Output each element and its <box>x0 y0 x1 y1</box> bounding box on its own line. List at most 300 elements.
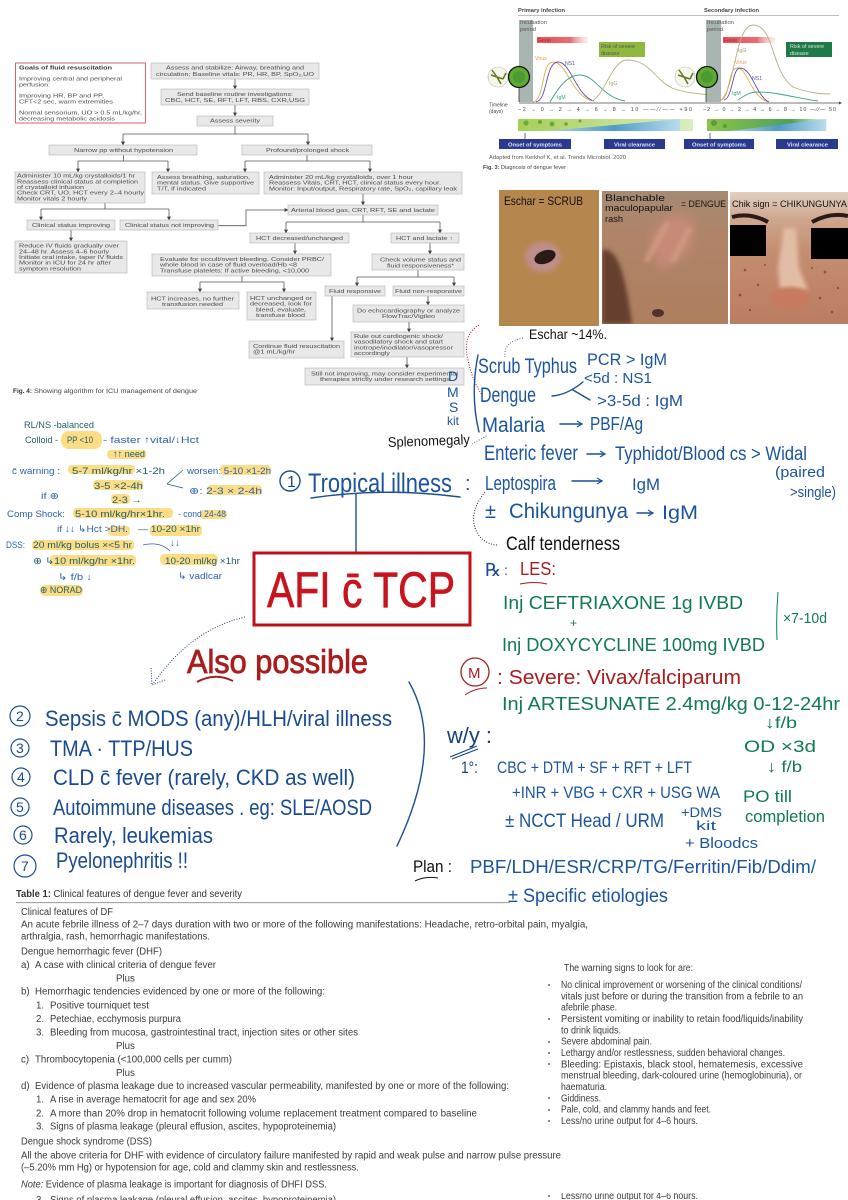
box: HCT and lactate raised <box>391 233 459 243</box>
box: profound shock <box>242 145 372 155</box>
warning signs bullets: Giddiness. <box>561 1093 601 1104</box>
section: dengue hemorrhagic fever: Positive tourniquet test <box>50 1000 149 1012</box>
note: calf tenderness <box>474 492 620 555</box>
caption: figure 3: Fig. 3: Diagnosis of dengue fever <box>483 165 566 171</box>
note: DMS kit: D <box>448 368 458 384</box>
section: dengue hemorrhagic fever: Hemorrhagic tendencies evidenced by one or more of the following: <box>35 986 325 998</box>
box: narrow pulse pressure: Narrow pp without hypotension <box>74 148 173 154</box>
text: plan of investigations: Plan : <box>413 857 452 876</box>
text: antibiotic regimen: Inj DOXYCYCLINE 100mg IVBD <box>502 635 765 655</box>
differential: leptospira: Leptospira <box>485 473 557 495</box>
note: DMS kit: kit <box>447 414 460 428</box>
box: administer 10 mL/kg: of crystalloid infusion <box>17 185 84 191</box>
heading: severe malaria: M <box>468 665 480 682</box>
note: colloid indications: PP <10 <box>67 435 93 446</box>
note: colloid indications: Colloid - <box>25 435 58 446</box>
callout: goals of fluid resuscitation: perfusion: <box>19 82 51 88</box>
differential: scrub typhus: PCR > IgM <box>587 350 667 369</box>
panel: warning signs list <box>545 963 803 1200</box>
curve labels <box>535 48 762 101</box>
heading: work-up: 1°: <box>461 758 478 777</box>
panel: ICU fluid management flowchart <box>13 63 464 395</box>
fever bars: Fever <box>724 38 738 44</box>
curve labels: Virus <box>735 60 747 66</box>
box: echocardiography <box>353 305 464 322</box>
box: HCT unchanged: bleed, evaluate, <box>256 307 307 313</box>
bracket: curved divider <box>397 682 424 846</box>
differential: leptospira <box>485 473 660 495</box>
callout: goals of fluid resuscitation: decreasing metabolic acidosis <box>19 116 115 122</box>
text: antibiotic regimen: + <box>570 616 577 630</box>
section: dengue hemorrhagic fever: Signs of plasma leakage (pleural effusion, ascites, hypoproteinemia) <box>50 1122 336 1132</box>
box: assess breathing: mental status. Give supportive <box>157 181 254 187</box>
box: reduce IV fluids: Initiate oral intake, taper IV fluids <box>19 255 123 261</box>
differential: chikungunya: IgM <box>662 503 698 524</box>
warning signs bullets: Bleeding: Epistaxis, black stool, hematemesis, excessive <box>561 1059 803 1070</box>
box: reduce IV fluids: symptom resolution <box>19 266 81 272</box>
text: primary investigations: kit <box>696 818 717 833</box>
panel: fluid regimen notes <box>6 420 271 596</box>
heading: treatment for LES: ℞ <box>485 560 501 580</box>
incubation period bands: period <box>707 27 723 33</box>
timeline axis: −2 → 0 → 2 → 4 → 6 → 8 → 10 ——⁄⁄—— +90 <box>518 107 692 113</box>
section: dengue hemorrhagic fever: Plus <box>116 974 135 984</box>
box: HCT unchanged <box>247 292 316 320</box>
panel: table of clinical features of dengue <box>16 889 588 1200</box>
incubation period bands: Incubation <box>520 20 547 26</box>
curve labels: Virus <box>535 56 547 62</box>
note: with warning signs regimen: 5-7 ml/kg/hr ×1-2h <box>72 466 165 477</box>
box: baseline investigations <box>161 89 309 105</box>
note: compensated shock regimen: if ↓↓ ↳Hct >DH. <box>57 524 128 535</box>
box: administer 10 mL/kg: Administer 10 mL/kg crystalloids/1 hr <box>17 174 135 180</box>
box: HCT increases: transfusion needed <box>162 302 223 308</box>
box: fluid non-responsive <box>393 286 464 296</box>
risk of severe disease boxes: disease <box>601 51 620 57</box>
section: dengue shock syndrome: Dengue shock syndrome (DSS) <box>21 1136 152 1148</box>
panel: clinical sign photographs <box>499 190 848 326</box>
note: colloid indications: RL/NS -balanced <box>24 420 94 431</box>
differential: enteric fever: Typhidot/Blood cs > Widal <box>615 444 807 465</box>
note: dengue shock syndrome regimen: ↳ f/b ↓ <box>58 572 92 583</box>
warning signs heading: The warning signs to look for are: <box>564 963 693 974</box>
onset and clearance labels: Viral clearance <box>787 142 828 148</box>
box: clinical status improving <box>27 220 115 230</box>
warning signs bullets: vitals just before or during the transition from a febrile to an <box>561 991 803 1002</box>
photo: dengue rash <box>602 191 728 324</box>
note: calf tenderness: Calf tenderness <box>506 534 620 555</box>
risk of severe disease boxes: Risk of severe <box>601 44 635 50</box>
viral load gradient bars <box>518 119 827 131</box>
list: other differential diagnoses: 3 <box>16 740 24 756</box>
section: dengue hemorrhagic fever: 3. <box>36 1122 44 1132</box>
section: clinical features of DF: An acute febrile illness of 2–7 days duration with two or more of the following manifestations: Headache, retro-orbital pain, myalgia, <box>21 920 588 930</box>
box: clinical status improving: Clinical status improving <box>32 223 110 229</box>
list: other differential diagnoses: Pyelonephritis !! <box>56 848 188 873</box>
section: dengue hemorrhagic fever: 2. <box>36 1108 44 1120</box>
note: dengue shock syndrome regimen: 10-20 ml/kg ×1hr <box>165 556 240 567</box>
table title: Table 1: Clinical features of dengue fever and severity <box>16 889 242 900</box>
note: with warning signs regimen <box>12 466 271 506</box>
timeline axis: Timeline <box>489 102 508 108</box>
list: other differential diagnoses: 2 <box>16 708 24 724</box>
panel: treatment notes <box>413 559 840 907</box>
box: clinical status not improving <box>120 220 218 230</box>
caption: figure 4: Showing algorithm for ICU management of dengue <box>34 389 198 395</box>
box: continue fluid resuscitation <box>249 341 344 358</box>
box: assess breathing: T/T, if indicated <box>157 186 206 192</box>
note: colloid indications <box>24 420 199 460</box>
box: administer 20 mL/kg: Monitor: Input/output, Respiratory rate, SpO₂, capillary leak <box>269 186 457 192</box>
rule and infection headings: Primary infection <box>518 8 566 14</box>
section: dengue hemorrhagic fever: a) <box>21 960 30 971</box>
box: narrow pulse pressure <box>49 145 197 155</box>
note: dengue shock syndrome regimen: ↓↓ <box>170 538 180 549</box>
text: primary investigations: CBC + DTM + SF + RFT + LFT <box>497 758 692 777</box>
differential: dengue: <5d : NS1 <box>584 370 652 387</box>
text: artesunate regimen: PO till <box>743 787 792 806</box>
section: dengue hemorrhagic fever <box>21 946 509 1132</box>
note: compensated shock regimen: Comp Shock: <box>7 509 65 520</box>
warning signs bullets: haematuria. <box>561 1082 607 1093</box>
box: administer 20 mL/kg <box>264 172 462 194</box>
timeline axis: −2 → 0 → 2 → 4 → 6 → 8 → 10 —⁄⁄— 50 <box>703 107 836 113</box>
warning signs bullets: to drink liquids. <box>561 1025 621 1036</box>
section: clinical features of DF <box>21 907 588 942</box>
callout: goals of fluid resuscitation: Normal sensorium, UO > 0.5 mL/kg/hr, <box>19 111 143 117</box>
note: with warning signs regimen: c̄ warning : <box>12 466 60 477</box>
box: check volume status: Check volume status and <box>380 258 461 264</box>
box: experimental therapies <box>305 368 464 385</box>
warning signs bullets: afebrile phase. <box>561 1003 617 1014</box>
photo: dengue rash: maculopapular <box>605 203 673 214</box>
curve labels: IgG <box>609 81 617 87</box>
section: dengue hemorrhagic fever: Bleeding from mucosa, gastrointestinal tract, injection sites or other sites <box>50 1028 358 1038</box>
box: evaluate for bleeding: Evaluate for occult/overt bleeding. Consider PRBC/ <box>160 257 325 263</box>
box: clinical status not improving: Clinical status not improving <box>125 223 214 229</box>
caption: figure 4: Fig. 4: <box>13 389 32 395</box>
note: compensated shock regimen: 5-10 ml/kg/hr×1hr. <box>75 509 165 520</box>
text: primary investigations: +DMS <box>681 804 722 820</box>
section: dengue hemorrhagic fever: A case with clinical criteria of dengue fever <box>35 960 217 971</box>
onset and clearance labels: Onset of symptoms <box>508 142 562 148</box>
text: artesunate regimen: completion <box>745 807 825 826</box>
rule and infection headings: Secondary infection <box>704 8 760 14</box>
callout: goals of fluid resuscitation: CFT<2 sec, warm extremities <box>19 99 113 105</box>
box: continue fluid resuscitation: @1 mL/kg/hr <box>253 350 295 356</box>
note: with warning signs regimen: worsen: 5-10 ×1-2h <box>186 466 271 477</box>
box: HCT decreased: HCT decreased/unchanged <box>256 236 343 242</box>
incubation period bands: Incubation <box>707 20 734 26</box>
differential: dengue <box>480 370 683 410</box>
section: dengue hemorrhagic fever: Thrombocytopenia (<100,000 cells per cumm) <box>35 1054 232 1066</box>
differential: malaria: Malaria <box>482 414 545 437</box>
text: primary investigations: + Bloodcs <box>685 835 758 852</box>
list: other differential diagnoses: CLD c̄ fever (rarely, CKD as well) <box>53 765 355 790</box>
note: DMS kit: M <box>447 384 459 400</box>
section: dengue shock syndrome <box>21 1136 561 1200</box>
text: primary investigations: ± NCCT Head / URM <box>505 811 664 832</box>
section: dengue hemorrhagic fever: Dengue hemorrhagic fever (DHF) <box>21 946 162 958</box>
incubation period bands: period <box>520 27 536 33</box>
heading: tropical illness: Tropical illness <box>308 468 452 498</box>
box: profound shock: Profound/prolonged shock <box>266 148 349 154</box>
box: reduce IV fluids <box>15 241 127 273</box>
section: dengue hemorrhagic fever: d) <box>21 1081 30 1092</box>
curve labels: IgM <box>557 95 566 101</box>
icons: mosquitoes and infected cells <box>488 66 718 88</box>
text: plan of investigations <box>413 857 816 907</box>
note: splenomegaly: Splenomegaly <box>388 431 470 450</box>
flowchart connectors <box>41 79 454 368</box>
box: rule out cardiogenic shock: accordingly <box>354 351 390 357</box>
note: dengue shock syndrome regimen: ⊕ NORAD <box>40 585 82 596</box>
photo: chik sign <box>730 192 848 324</box>
photo: dengue rash: Blanchable <box>605 193 665 204</box>
caption: figure 3 <box>483 155 626 171</box>
box: HCT unchanged: transfuse blood <box>256 313 305 319</box>
differential: dengue: >3-5d : IgM <box>597 393 683 410</box>
section: dengue shock syndrome: Note: Evidence of plasma leakage is important for diagnosis of DHFI DSS. <box>21 1180 327 1190</box>
photo: dengue rash: = DENGUE <box>681 199 726 210</box>
section: dengue hemorrhagic fever: 1. <box>36 1000 44 1012</box>
note: dengue shock syndrome regimen: 20 ml/kg bolus ×<5 hr <box>33 540 132 551</box>
box: administer 20 mL/kg: Reassess Vitals, CRT, HCT, clinical status every hour. <box>269 181 442 187</box>
panel: dengue timeline diagram <box>483 8 842 171</box>
list: other differential diagnoses: TMA · TTP/HUS <box>50 736 193 761</box>
box: continue fluid resuscitation: Continue fluid resuscitation <box>253 344 340 350</box>
section: clinical features of DF: Clinical features of DF <box>21 907 113 918</box>
title box: AFI with TCP <box>254 553 470 625</box>
note: DMS kit: S <box>449 399 458 415</box>
text: primary investigations <box>497 758 758 852</box>
box: experimental therapies: Still not improving, may consider experimental <box>311 371 458 377</box>
note: with warning signs regimen: 2-3 → <box>112 495 142 506</box>
note: colloid indications: - faster ↑vital/↓Hct <box>103 435 199 446</box>
box: administer 10 mL/kg: Check CRT, UO, HCT every 2–4 hourly <box>17 191 144 197</box>
photo: dengue rash: rash <box>605 214 623 225</box>
differential: scrub typhus: Scrub Typhus <box>478 355 577 378</box>
heading: work-up: w/y : <box>446 723 492 748</box>
text: artesunate regimen: OD ×3d <box>744 737 816 756</box>
box: arterial blood gas: Arterial blood gas, CRT, RFT, SE and lactate <box>291 208 435 214</box>
heading: treatment for LES <box>485 559 556 584</box>
box: fluid responsive: Fluid responsive <box>329 289 381 295</box>
list: other differential diagnoses: Sepsis c̄ MODS (any)/HLH/viral illness <box>45 706 392 731</box>
onset and clearance labels: Onset of symptoms <box>692 142 746 148</box>
differential: leptospira: IgM <box>632 475 660 494</box>
box: rule out cardiogenic shock: Rule out cardiogenic shock/ <box>354 334 444 340</box>
box: check volume status <box>372 254 464 270</box>
title box: AFI with TCP: AFI c̄ TCP <box>267 562 455 618</box>
heading: severe malaria: : Severe: Vivax/falciparum <box>497 667 741 689</box>
warning signs bullets: Less/no urine output for 4–6 hours. <box>561 1116 698 1127</box>
differential: enteric fever <box>484 442 836 501</box>
box: HCT unchanged: HCT unchanged or <box>250 296 312 302</box>
text: plan of investigations: PBF/LDH/ESR/CRP/TG/Ferritin/Fib/Ddim/ <box>470 857 816 877</box>
differential: dengue: Dengue <box>480 384 536 407</box>
note: with warning signs regimen: if ⊕ <box>41 491 59 502</box>
box: HCT increases: HCT increases, no further <box>151 296 234 302</box>
box: HCT unchanged: decreased, look for <box>250 302 312 308</box>
box: evaluate for bleeding <box>152 254 331 276</box>
text: artesunate regimen: Inj ARTESUNATE 2.4mg/kg 0-12-24hr <box>502 694 840 714</box>
section: dengue hemorrhagic fever: c) <box>21 1054 29 1066</box>
differential: malaria <box>482 414 643 437</box>
box: echocardiography: FlowTrac/Vigileo <box>382 314 435 320</box>
section: dengue hemorrhagic fever: 3. <box>36 1028 44 1038</box>
warning signs bullets <box>548 980 803 1127</box>
arrow: dotted arrow to also possible <box>151 617 245 685</box>
differential: chikungunya: ± <box>485 501 496 523</box>
risk of severe disease boxes <box>599 42 832 57</box>
callout: goals of fluid resuscitation: Improving central and peripheral <box>19 77 122 83</box>
antibody and virus curves <box>533 25 830 102</box>
note: eschar prevalence: Eschar ~14%. <box>529 326 607 342</box>
box: evaluate for bleeding: Transfuse platelets: If active bleeding, <10,000 <box>160 268 309 274</box>
warning signs bullets: Severe abdominal pain. <box>561 1037 652 1048</box>
warning signs bullets: No clinical improvement or worsening of the clinical conditions/ <box>561 980 802 991</box>
text: antibiotic regimen: ×7-10d <box>783 610 827 627</box>
box: administer 10 mL/kg: Monitor vitals 2 hourly <box>17 196 87 202</box>
incubation period bands <box>519 20 734 102</box>
list: other differential diagnoses: Rarely, leukemias <box>54 823 213 848</box>
box: reduce IV fluids: Reduce IV fluids gradually over <box>19 244 119 250</box>
box: baseline investigations: CBC, HCT, SE, RFT, LFT, RBS, CXR,USG <box>165 98 305 104</box>
differential: malaria: PBF/Ag <box>590 414 643 434</box>
box: fluid non-responsive: Fluid non-responsive <box>395 289 462 295</box>
curve labels: IgG <box>738 48 746 54</box>
curve labels: NS1 <box>752 76 762 82</box>
box: assess and stabilize: Assess and stabilize: Airway, breathing and <box>166 66 304 72</box>
fever bars: Fever <box>538 38 552 44</box>
curve labels: NS1 <box>565 61 575 67</box>
text: artesunate regimen <box>502 694 840 826</box>
box: assess breathing: Assess breathing, saturation, <box>157 175 251 181</box>
differential: enteric fever: Enteric fever <box>484 442 578 465</box>
box: baseline investigations: Send baseline routine investigations: <box>177 92 294 98</box>
warning signs bullets: Persistent vomiting or inability to retain food/liquids/inability <box>561 1014 803 1025</box>
timeline axis <box>489 88 842 115</box>
list: other differential diagnoses: 6 <box>19 827 27 843</box>
note: compensated shock regimen: - cond 24-48 <box>178 509 226 520</box>
note: dengue shock syndrome regimen <box>6 538 240 596</box>
heading: work-up <box>446 723 492 777</box>
section: dengue hemorrhagic fever: A more than 20% drop in hematocrit following volume replacement treatment compared to baseline <box>50 1108 477 1120</box>
differential: chikungunya: Chikungunya <box>509 500 628 523</box>
list: other differential diagnoses: 7 <box>21 858 29 874</box>
yellow highlights <box>32 431 271 596</box>
section: dengue hemorrhagic fever: 2. <box>36 1014 44 1025</box>
heading: treatment for LES: LES: <box>520 559 556 579</box>
note: eschar prevalence <box>505 326 607 357</box>
fever bars <box>537 37 775 44</box>
warning signs bullets: menstrual bleeding, dark-coloured urine (hemoglobinuria), or <box>561 1071 803 1082</box>
note: dengue shock syndrome regimen: DSS: <box>6 540 25 551</box>
warning signs bullets: Pale, cold, and clammy hands and feet. <box>561 1105 711 1116</box>
box: HCT increases <box>147 292 239 309</box>
box: HCT decreased <box>250 233 349 243</box>
section: dengue hemorrhagic fever: A rise in average hematocrit for age and sex 20% <box>50 1094 256 1106</box>
box: check volume status: fluid responsiveness* <box>387 263 455 269</box>
section: dengue shock syndrome: All the above criteria for DHF with evidence of circulatory failure manifested by rapid and weak pulse and narrow pulse pressure <box>21 1150 561 1162</box>
box: fluid responsive <box>325 286 385 296</box>
box: assess severity <box>197 116 273 126</box>
note: compensated shock regimen <box>7 509 226 535</box>
note: with warning signs regimen: ⊕: 2-3 × 2-4h <box>189 486 262 497</box>
box: experimental therapies: therapies strictly under research settings <box>320 377 450 383</box>
box: evaluate for bleeding: whole blood in case of fluid overload/Hb <8 <box>159 263 297 269</box>
note: dengue shock syndrome regimen: ↳ vadlcar <box>178 571 222 582</box>
box: reduce IV fluids: Monitor in ICU for 24 hr after <box>19 261 111 267</box>
warning signs bullets: Lethargy and/or restlessness, sudden behavioral changes. <box>561 1048 785 1059</box>
list: other differential diagnoses: Autoimmune diseases . eg: SLE/AOSD <box>53 795 372 820</box>
differential: scrub typhus <box>478 350 667 378</box>
box: assess severity: Assess severity <box>210 118 260 124</box>
photo: eschar <box>499 190 599 326</box>
heading: severe malaria <box>461 658 741 695</box>
section: dengue hemorrhagic fever: Plus <box>116 1041 135 1052</box>
differential: enteric fever: (paired <box>775 464 825 481</box>
timeline axis: (days) <box>489 109 503 115</box>
note: with warning signs regimen: 3-5 ×2-4h <box>94 481 143 492</box>
section: dengue shock syndrome: (–5.20% mm Hg) or hypotension for age, cold and clammy skin and restlessness. <box>21 1162 359 1174</box>
text: antibiotic regimen: Inj CEFTRIAXONE 1g IVBD <box>503 593 743 613</box>
box: administer 10 mL/kg: Reassess clinical status at completion <box>17 179 138 185</box>
panel: tropical illness differentials <box>388 325 836 555</box>
section: dengue hemorrhagic fever: Petechiae, ecchymosis purpura <box>50 1014 182 1025</box>
clipped repeated warning sign <box>545 1186 710 1200</box>
text: primary investigations: +INR + VBG + CXR + USG WA <box>512 783 721 802</box>
callout: goals of fluid resuscitation: Goals of fluid resuscitation <box>19 65 113 71</box>
text: plan of investigations: ± Specific etiologies <box>508 886 668 907</box>
box: rule out cardiogenic shock: inotrope/inodilator/vasopressor <box>354 345 453 351</box>
text: antibiotic regimen <box>502 592 827 655</box>
text: artesunate regimen: ↓f/b <box>765 715 797 732</box>
note: colloid indications: ↑↑ need <box>113 449 145 460</box>
box: administer 20 mL/kg: Administer 20 mL/kg crystalloids, over 1 hour <box>269 175 413 181</box>
box: reduce IV fluids: 24–48 hr. Assess 4–6 hourly <box>19 249 109 255</box>
heading: treatment for LES: : <box>504 562 508 578</box>
list: other differential diagnoses: 5 <box>16 799 24 815</box>
photo: chik sign: Chik sign = CHIKUNGUNYA <box>732 199 848 210</box>
box: HCT and lactate raised: HCT and lactate ↑ <box>396 236 453 242</box>
differential: chikungunya <box>485 500 698 524</box>
list: other differential diagnoses <box>10 706 392 877</box>
curve labels: IgM <box>732 91 741 97</box>
callout: goals of fluid resuscitation: Improving HR, BP and PP, <box>19 94 105 100</box>
box: administer 10 mL/kg <box>15 172 145 203</box>
section: dengue hemorrhagic fever: b) <box>21 986 30 998</box>
heading: tropical illness <box>280 468 471 552</box>
heading: also possible: Also possible <box>187 643 368 680</box>
box: assess breathing <box>152 172 259 194</box>
box: arterial blood gas <box>288 205 438 215</box>
heading: tropical illness: 1 <box>287 474 296 491</box>
risk of severe disease boxes: disease <box>790 51 809 57</box>
box: assess and stabilize: circulation; Baseline vitals: PR, HR, BP, SpO₂,UO <box>156 72 315 78</box>
section: dengue hemorrhagic fever: Evidence of plasma leakage due to increased vascular permeability, manifested by one or more of the following: <box>35 1081 509 1092</box>
risk of severe disease boxes: Risk of severe <box>790 44 824 50</box>
note: dengue shock syndrome regimen: ⊕ ↳10 ml/kg/hr ×1hr. <box>33 556 135 567</box>
section: clinical features of DF: arthralgia, rash, hemorrhagic manifestations. <box>21 932 210 942</box>
list: other differential diagnoses: 4 <box>17 769 25 785</box>
section: dengue hemorrhagic fever: 1. <box>36 1094 44 1106</box>
photo: eschar: Eschar = SCRUB <box>504 194 583 208</box>
heading: tropical illness: : <box>465 473 471 495</box>
box: rule out cardiogenic shock: vasodilatory shock and start <box>354 340 444 346</box>
differential: enteric fever: >single) <box>790 484 836 501</box>
